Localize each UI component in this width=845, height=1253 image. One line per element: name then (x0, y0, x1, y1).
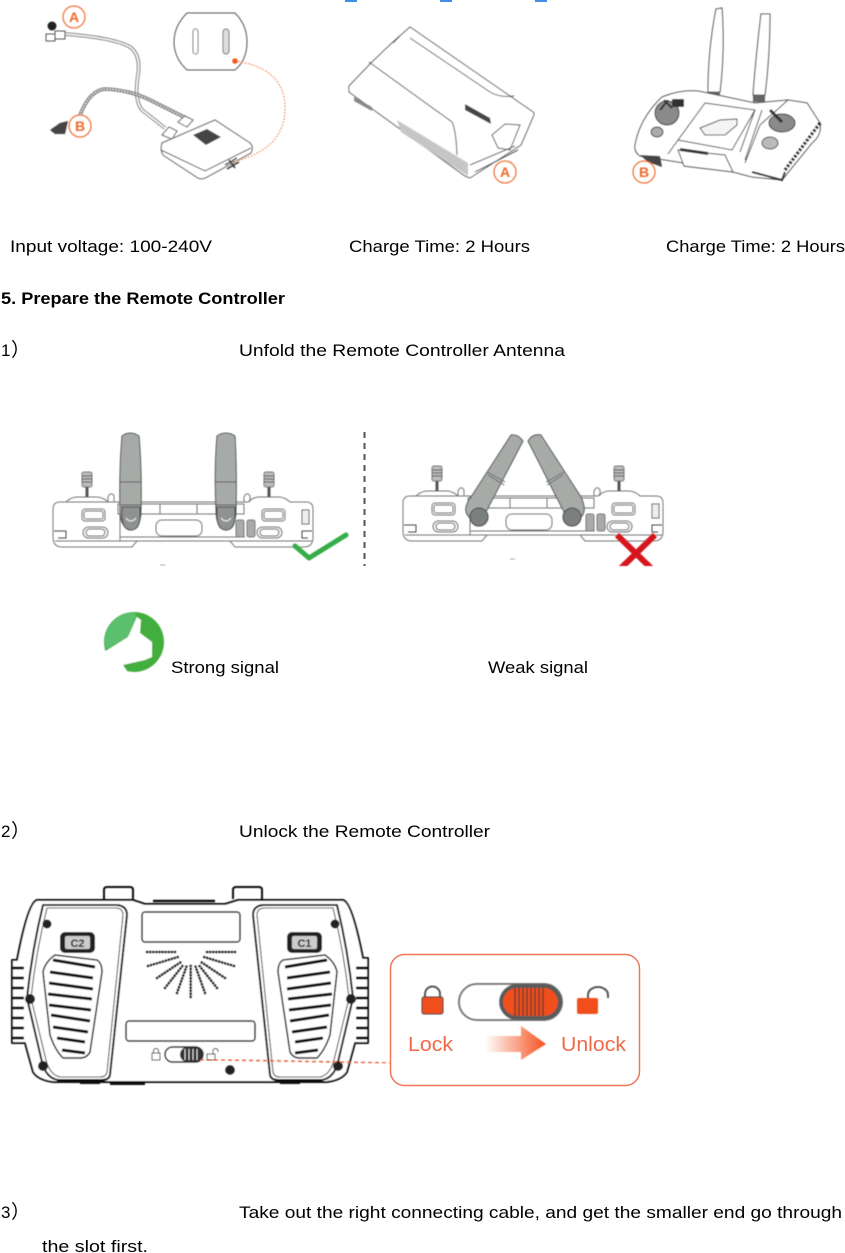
step 1 number: 1 (1, 341, 10, 360)
icon: wall socket plate (174, 13, 247, 70)
badge B (633, 161, 655, 183)
illustration: antennas parallel, strong signal (53, 433, 346, 565)
dashed divider (364, 432, 366, 566)
left grip panel: C2 (70, 938, 85, 950)
dashed leader line (200, 1060, 390, 1063)
right grip panel (253, 905, 356, 1080)
step 3 number: ） (11, 1197, 30, 1224)
icon: red cross (617, 535, 655, 572)
step 2 number: ） (11, 816, 30, 843)
badge A (494, 161, 516, 183)
badge B: B (639, 164, 649, 180)
illustration: battery (349, 27, 534, 183)
step 3 text line 1: Take out the right connecting cable, and get the smaller end go through (239, 1203, 842, 1222)
dotted connector (232, 61, 285, 162)
vent dots (147, 952, 235, 997)
right grip panel: C1 (297, 938, 312, 950)
heading: 5. Prepare the Remote Controller (1, 289, 285, 308)
illustration: remote controller with raised antennas (633, 8, 820, 183)
hub box (161, 116, 252, 179)
illustration: controller rear view (12, 887, 368, 1084)
icon: thumbs up (96, 612, 164, 674)
illustration: antennas angled, weak signal (403, 435, 663, 572)
badge A: A (500, 164, 510, 180)
label: strong signal: Strong signal (171, 658, 279, 677)
badge B (69, 115, 91, 137)
caption: input voltage: Input voltage: 100-240V (10, 237, 213, 256)
step 2 number: 2 (1, 822, 10, 841)
badge A: A (69, 9, 79, 25)
callout: lock to unlock (390, 954, 640, 1086)
step 1 text: Unfold the Remote Controller Antenna (239, 341, 566, 360)
caption: battery charge time: Charge Time: 2 Hours (349, 237, 530, 256)
caption: controller charge time: Charge Time: 2 Hours (666, 237, 845, 256)
illustration: charging hub with cables and wall plug (46, 6, 285, 179)
label: weak signal: Weak signal (488, 658, 588, 677)
left grip panel (25, 905, 127, 1080)
toggle switch (459, 984, 562, 1020)
step 3 number: 3 (1, 1203, 10, 1222)
badge A (63, 6, 85, 28)
icon: open lock (577, 987, 608, 1014)
arrow (485, 1026, 546, 1060)
icon: closed lock (422, 987, 443, 1014)
step 1 number: ） (11, 335, 30, 362)
label: lock: Lock (408, 1034, 454, 1056)
blue marks at the top edge (345, 0, 547, 2)
label: unlock: Unlock (561, 1034, 627, 1056)
small lock slider (152, 1047, 218, 1062)
icon: green check (295, 535, 346, 558)
badge B: B (75, 118, 85, 134)
step 2 text: Unlock the Remote Controller (239, 822, 490, 841)
